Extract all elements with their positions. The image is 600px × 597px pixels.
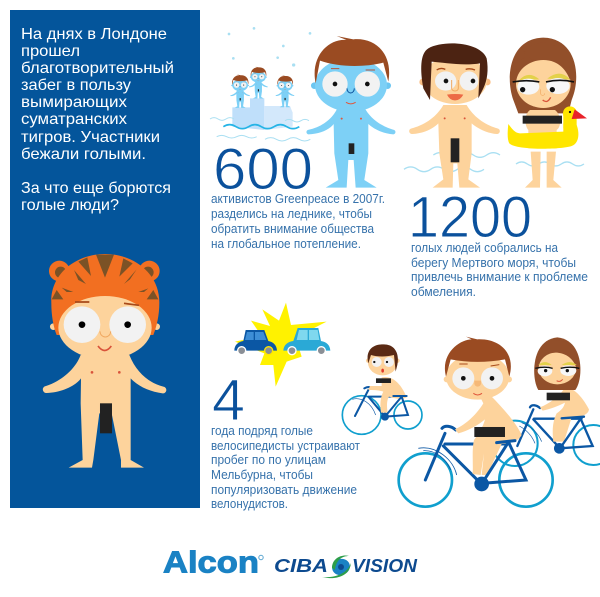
text: 4 description: велосипедисты устраивают xyxy=(211,439,360,453)
intro text: вымирающих xyxy=(21,94,127,111)
illustration: glacier with activists xyxy=(210,27,311,141)
text: 1200 description xyxy=(411,241,588,299)
intro text: За что еще борются xyxy=(21,180,171,197)
illustration: Dead Sea couple xyxy=(404,38,587,188)
text: 600 description: разделись на леднике, чтобы xyxy=(211,207,372,221)
intro text: забег в пользу xyxy=(21,77,131,94)
woman with duck ring xyxy=(508,38,587,188)
illustration: woman cyclist xyxy=(492,337,600,466)
intro text: бежали голыми. xyxy=(21,146,146,163)
text: 1200 description: берегу Мертвого моря, чтобы xyxy=(411,256,576,270)
text: 4 description: года подряд голые xyxy=(211,424,313,438)
illustration: car crash xyxy=(234,303,330,387)
logo: CIBA Vision: VISION xyxy=(352,555,418,576)
text: 4 description: велонудистов. xyxy=(211,497,288,511)
text: 600 description xyxy=(211,192,385,251)
text: 600 description: обратить внимание общества xyxy=(211,222,374,236)
waves xyxy=(404,153,584,172)
text: 4 description: пробег по по улицам xyxy=(211,453,326,467)
text: 4 description: популяризовать движение xyxy=(211,483,357,497)
text: 1200 description: голых людей собрались на xyxy=(411,241,558,255)
man xyxy=(409,43,500,188)
intro text xyxy=(21,26,174,214)
intro text: голые люди? xyxy=(21,197,119,214)
text: 1200 description: привлечь внимание к проблеме xyxy=(411,270,588,284)
stat number: 1200: 1200 xyxy=(408,185,532,250)
illustration: man cyclist xyxy=(399,337,553,507)
logo: CIBA Vision: CIBA xyxy=(274,555,328,576)
intro text: На днях в Лондоне xyxy=(21,26,167,43)
intro text: прошел xyxy=(21,43,80,60)
text: 4 description xyxy=(211,424,360,511)
text: 600 description: активистов Greenpeace в 2007г. xyxy=(211,192,385,206)
intro text: суматранских xyxy=(21,111,127,128)
figure: boy in tiger hat xyxy=(43,254,166,468)
figure: blue man xyxy=(306,36,395,188)
illustration: small cyclist xyxy=(342,344,422,434)
stat number: 4: 4 xyxy=(212,368,245,433)
text: 600 description: на глобальное потепление. xyxy=(211,237,361,251)
stat number: 600: 600 xyxy=(213,137,313,202)
logo: Alcon: Alcon xyxy=(163,544,259,580)
text: 1200 description: обмеления. xyxy=(411,285,476,299)
panel: blue intro column xyxy=(10,10,200,508)
text: 4 description: Мельбурна, чтобы xyxy=(211,468,313,482)
intro text: благотворительный xyxy=(21,60,174,77)
logo: CIBA Vision xyxy=(274,555,418,578)
intro text: тигров. Участники xyxy=(21,129,160,146)
